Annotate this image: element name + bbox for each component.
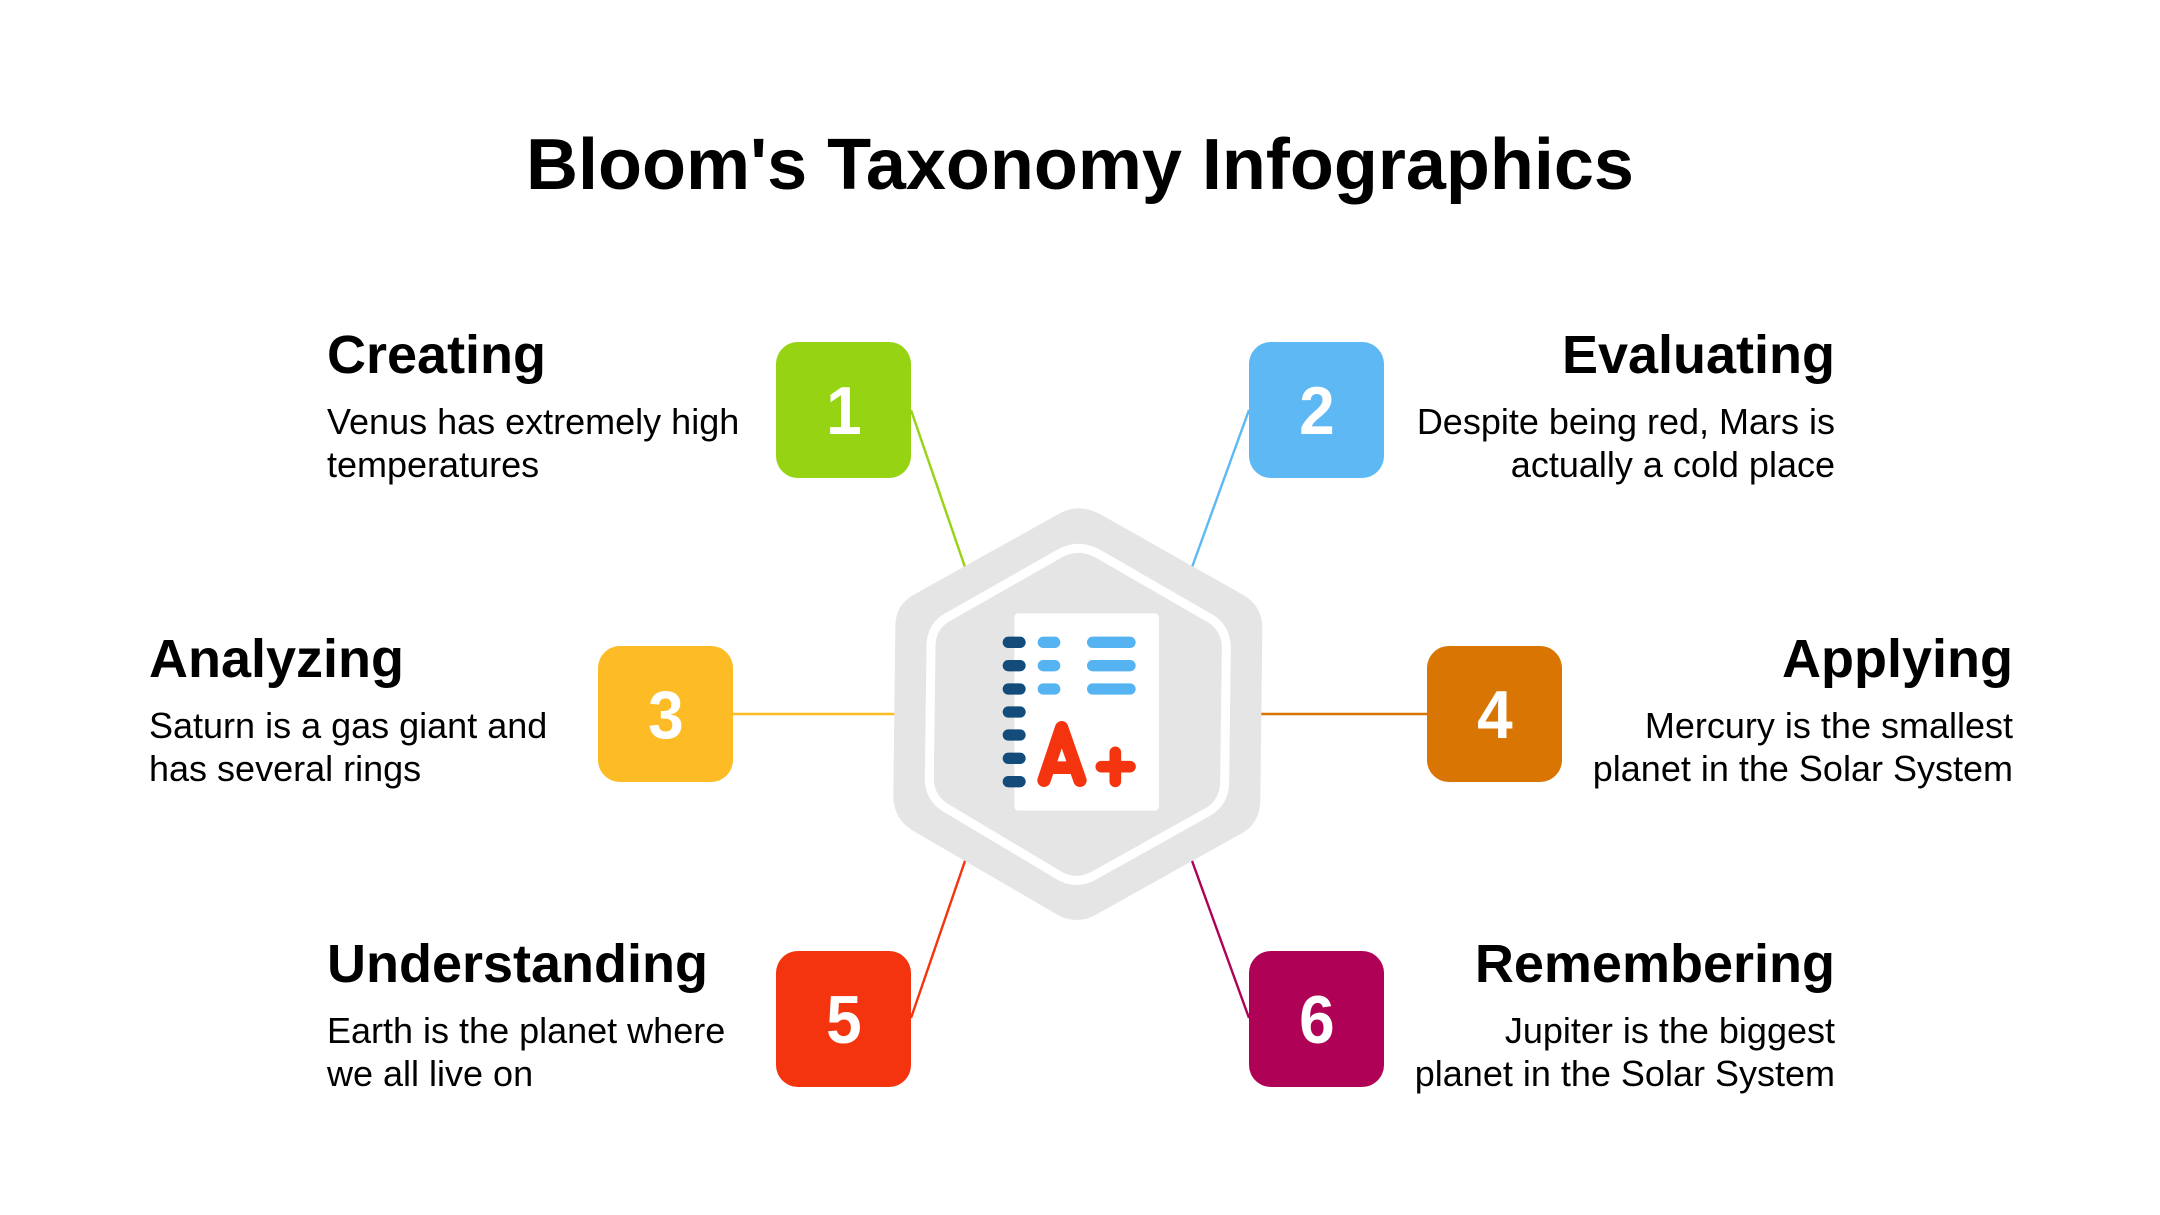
connector: 4 to hexagon (1260, 713, 1427, 715)
heading: Evaluating (1562, 325, 1835, 385)
icon: notebook with A+ grade (1003, 613, 1159, 811)
tile 5 (776, 951, 911, 1087)
tile 4 (1427, 646, 1562, 782)
description (327, 401, 739, 485)
connector: 2 to hexagon (1191, 410, 1249, 570)
description: Earth is the planet where (327, 1010, 725, 1051)
text block: Applying (1593, 629, 2013, 789)
description: temperatures (327, 444, 539, 485)
notebook text lines (1038, 637, 1136, 695)
description (1415, 1010, 1835, 1094)
text block: Analyzing (149, 629, 547, 789)
title: Bloom's Taxonomy Infographics (526, 125, 1634, 205)
description (149, 705, 547, 789)
central hexagon (893, 508, 1262, 920)
heading: Analyzing (149, 629, 404, 689)
description: Jupiter is the biggest (1505, 1010, 1835, 1051)
tile 5: 5 (826, 982, 861, 1058)
tile 1 (776, 342, 911, 478)
hexagon: outer grey (893, 508, 1262, 920)
heading: Applying (1782, 629, 2013, 689)
connector: 5 to hexagon (911, 858, 966, 1018)
tile 4: 4 (1477, 677, 1512, 753)
text block: Remembering (1415, 934, 1835, 1094)
text block: Creating (327, 325, 739, 485)
description (1593, 705, 2013, 789)
description: has several rings (149, 748, 421, 789)
description: we all live on (327, 1053, 533, 1094)
connector: 1 to hexagon (911, 410, 966, 570)
connector: 6 to hexagon (1191, 858, 1249, 1018)
description: Venus has extremely high (327, 401, 739, 442)
tile 3 (598, 646, 733, 782)
description: planet in the Solar System (1415, 1053, 1835, 1094)
heading: Remembering (1475, 934, 1835, 994)
connector: 3 to hexagon (733, 713, 896, 715)
hexagon: inner white ring (929, 548, 1226, 880)
text block: Evaluating (1417, 325, 1835, 485)
tile 6 (1249, 951, 1384, 1087)
heading: Creating (327, 325, 546, 385)
grade A+ (1044, 728, 1130, 781)
description: actually a cold place (1511, 444, 1835, 485)
description: planet in the Solar System (1593, 748, 2013, 789)
tile 2 (1249, 342, 1384, 478)
tile 6: 6 (1299, 982, 1334, 1058)
description (1417, 401, 1835, 485)
text block: Understanding (327, 934, 725, 1094)
notebook page (1014, 613, 1159, 811)
description: Despite being red, Mars is (1417, 401, 1835, 442)
heading: Understanding (327, 934, 708, 994)
tile 3: 3 (648, 677, 683, 753)
description: Saturn is a gas giant and (149, 705, 547, 746)
description: Mercury is the smallest (1645, 705, 2013, 746)
tile 1: 1 (826, 373, 861, 449)
notebook spiral binding (1003, 637, 1026, 787)
description (327, 1010, 725, 1094)
tile 2: 2 (1299, 373, 1334, 449)
